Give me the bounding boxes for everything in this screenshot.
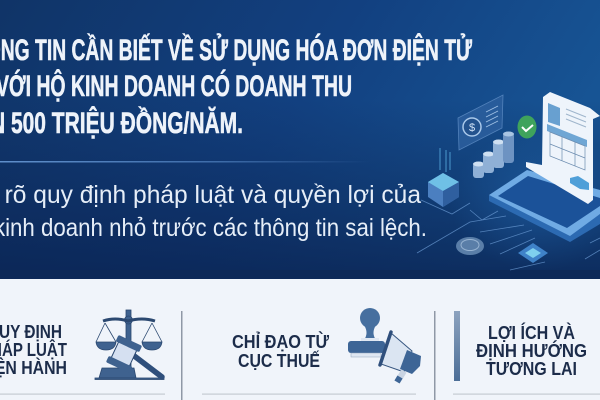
card 2 heading: CỤC THUẾ (238, 350, 320, 371)
illustration: digital invoice on laptop (417, 92, 600, 270)
card 3 heading (476, 322, 587, 379)
card 1 heading (0, 322, 67, 378)
dollar panel (458, 95, 503, 150)
chip (518, 243, 548, 263)
subtitle text (0, 181, 427, 242)
card 3 heading: ĐỊNH HƯỚNG (476, 340, 587, 361)
panel: card strip (0, 279, 600, 400)
circuit lines (417, 200, 600, 270)
icon: scales and gavel (95, 310, 164, 380)
server box (428, 148, 459, 207)
dollar panel: $ (469, 122, 475, 134)
card 3 heading: LỢI ÍCH VÀ (488, 322, 575, 343)
title (0, 33, 472, 140)
card 2 heading (232, 331, 329, 371)
card 3 heading: TƯƠNG LAI (486, 359, 577, 379)
green check badge (518, 116, 536, 138)
laptop base (489, 170, 600, 242)
coin stacks (473, 132, 514, 178)
icon: stamp and megaphone (348, 308, 421, 382)
invoice document (526, 92, 600, 204)
coin on circuit (456, 237, 484, 255)
accent bar (454, 311, 460, 381)
card 2 heading: CHỈ ĐẠO TỪ (232, 331, 329, 352)
panel: dark blue header (0, 0, 600, 279)
divider line (0, 161, 370, 162)
